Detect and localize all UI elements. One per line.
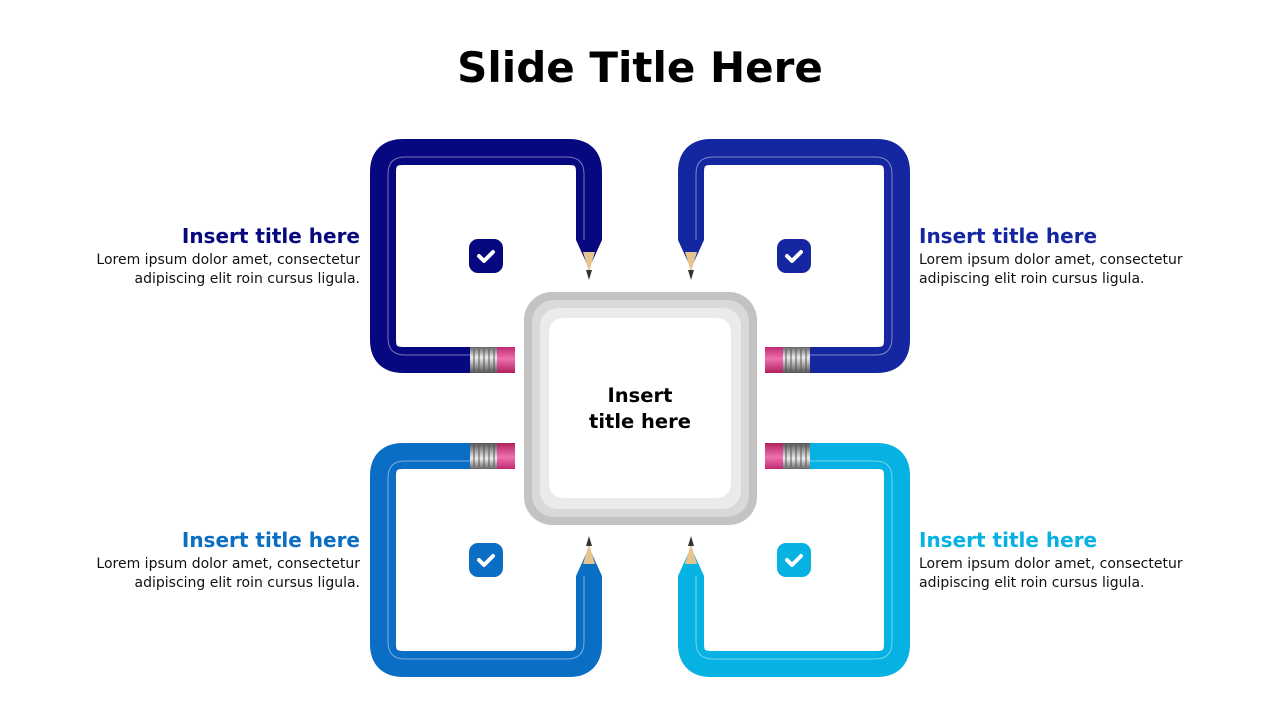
text block bottom-left: Lorem ipsum dolor amet, consectetur (96, 556, 360, 572)
pencil top-left (383, 152, 602, 373)
title: Slide Title Here (457, 43, 823, 92)
pencil top-right (678, 152, 897, 373)
text block top-right: Lorem ipsum dolor amet, consectetur (919, 252, 1183, 268)
center text (589, 384, 691, 433)
text block bottom-left: adipiscing elit roin cursus ligula. (135, 575, 360, 591)
text block top-left: Insert title here (182, 224, 360, 248)
text block bottom-left (96, 528, 360, 591)
text block bottom-right: adipiscing elit roin cursus ligula. (919, 575, 1144, 591)
text block bottom-left: Insert title here (182, 528, 360, 552)
text block top-right: adipiscing elit roin cursus ligula. (919, 271, 1144, 287)
text block top-left: adipiscing elit roin cursus ligula. (135, 271, 360, 287)
text block bottom-right (919, 528, 1183, 591)
pencil bottom-left (383, 443, 602, 664)
text block top-right: Insert title here (919, 224, 1097, 248)
text block top-left (96, 224, 360, 287)
center box (524, 292, 757, 525)
text block bottom-right: Insert title here (919, 528, 1097, 552)
center text: title here (589, 410, 691, 433)
pencil bottom-right (678, 443, 897, 664)
check icons (469, 239, 811, 577)
text block top-left: Lorem ipsum dolor amet, consectetur (96, 252, 360, 268)
text block top-right (919, 224, 1183, 287)
text block bottom-right: Lorem ipsum dolor amet, consectetur (919, 556, 1183, 572)
center text: Insert (608, 384, 672, 407)
